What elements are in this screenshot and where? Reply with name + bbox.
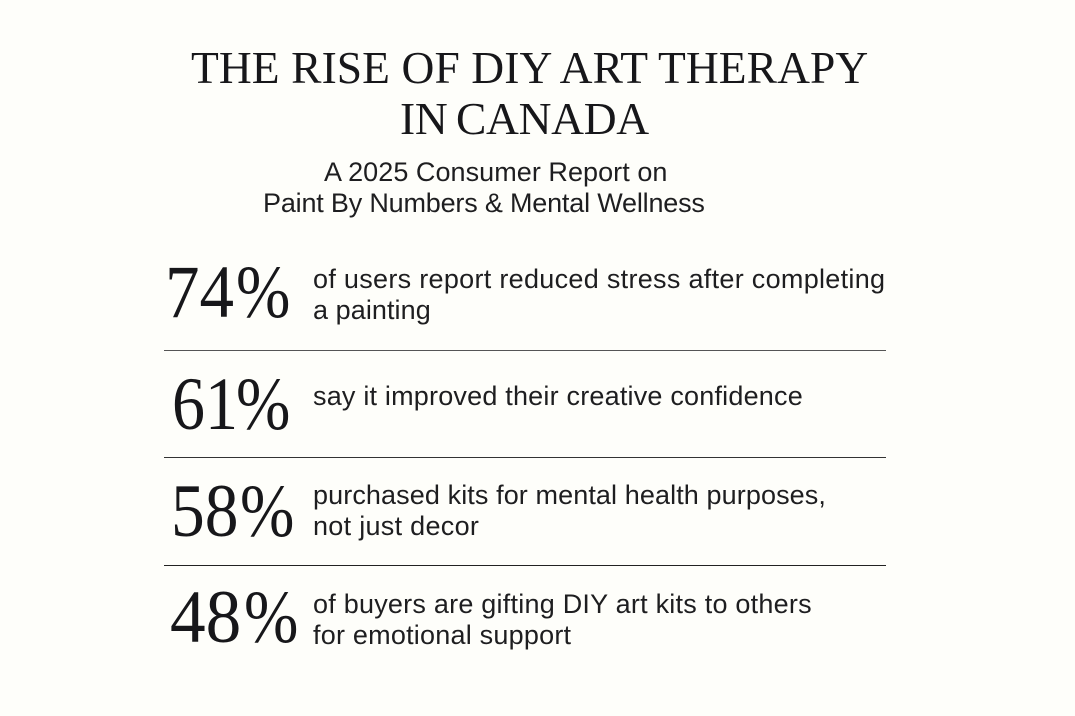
- stat text 74%: [313, 264, 885, 325]
- stat number 48%: [170, 576, 298, 659]
- stat text 58%: purchased kits for mental health purposes,: [313, 480, 826, 510]
- stat text 48%: [313, 589, 812, 650]
- stat number 74%: 74: [165, 251, 234, 334]
- subtitle: A 2025 Consumer Report on: [324, 157, 667, 187]
- title: [191, 42, 868, 144]
- subtitle: [263, 157, 705, 218]
- stat text 48%: of buyers are gifting DIY art kits to others: [313, 589, 812, 619]
- stat row: 74%: [165, 251, 885, 334]
- stat text 61%: say it improved their creative confidence: [313, 381, 803, 411]
- stat text 58%: [313, 480, 826, 541]
- stat number 48%: 48: [170, 576, 241, 659]
- stat row: 58%: [171, 470, 826, 553]
- stat row: 61%: [172, 363, 803, 446]
- title: THE RISE OF DIY ART THERAPY: [191, 42, 868, 93]
- stat number 58%: [171, 470, 294, 553]
- stat row: 48%: [170, 576, 812, 659]
- stat number 74%: [165, 251, 290, 334]
- stat text 58%: not just decor: [313, 511, 479, 541]
- stat number 74%: %: [236, 251, 290, 334]
- stat number 61%: 61: [172, 363, 238, 446]
- stat text 74%: of users report reduced stress after completing: [313, 264, 885, 294]
- stat number 58%: 58: [171, 470, 238, 553]
- stat number 61%: [172, 363, 290, 446]
- stat number 58%: %: [240, 470, 294, 553]
- title: IN CANADA: [400, 93, 649, 144]
- stat number 48%: %: [244, 576, 298, 659]
- stat text 74%: a painting: [313, 295, 431, 325]
- stat text 48%: for emotional support: [313, 620, 571, 650]
- subtitle: Paint By Numbers & Mental Wellness: [263, 188, 705, 218]
- stat number 61%: %: [236, 363, 290, 446]
